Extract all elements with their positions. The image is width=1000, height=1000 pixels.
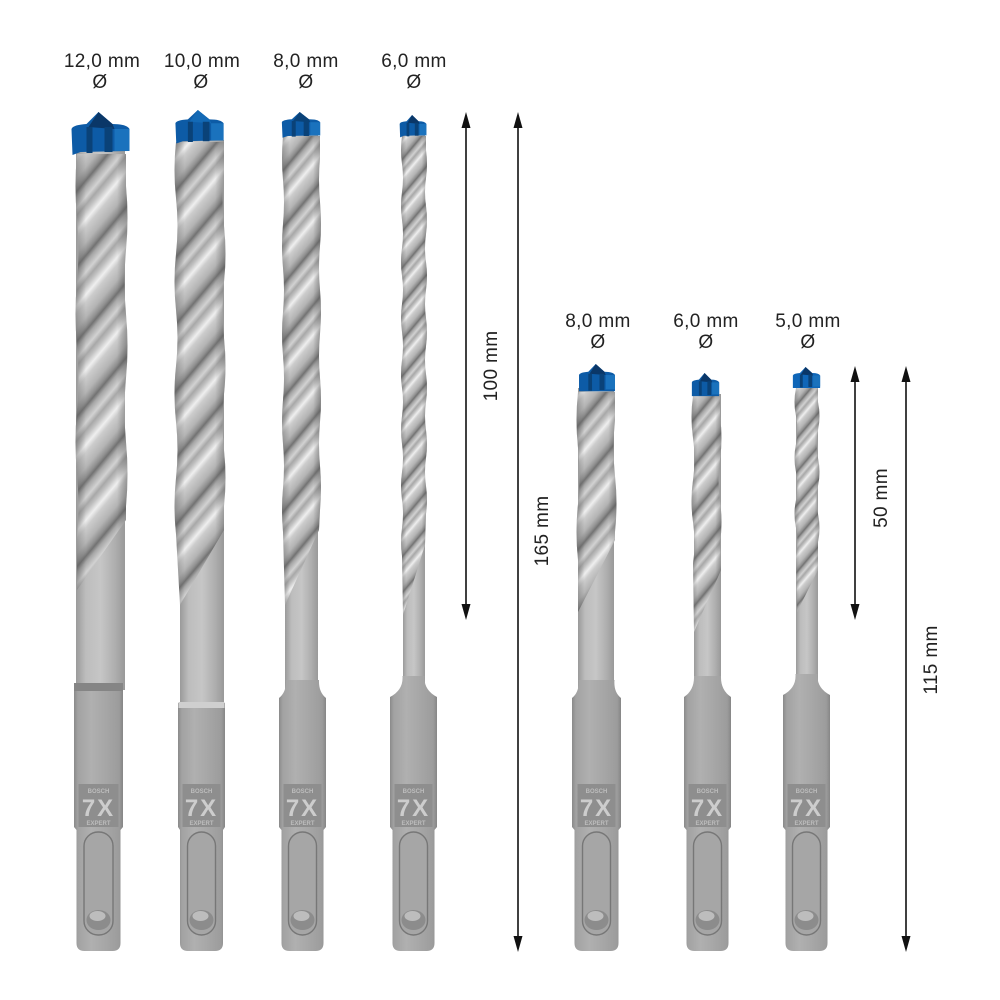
drill bit 10,0 mm bbox=[174, 110, 226, 951]
diameter label 6,0 mm short: Ø bbox=[698, 332, 714, 353]
marking panel: BOSCH bbox=[292, 789, 313, 795]
shank slot bbox=[288, 832, 316, 935]
spiral flutes bbox=[401, 136, 427, 615]
marking panel: EXPERT bbox=[86, 821, 111, 827]
length label 165 mm: 165 mm bbox=[532, 496, 553, 566]
blue carbide tip bbox=[72, 112, 130, 155]
marking panel: 7X bbox=[286, 795, 319, 822]
marking panel bbox=[578, 784, 616, 827]
marking panel: BOSCH bbox=[796, 789, 817, 795]
diameter label 8,0 mm short: Ø bbox=[590, 332, 606, 353]
marking panel: EXPERT bbox=[189, 821, 214, 827]
marking panel: 7X bbox=[185, 795, 218, 822]
diameter label 8,0 mm short: 8,0 mm bbox=[565, 311, 631, 332]
shank bbox=[572, 680, 621, 951]
spiral flutes bbox=[692, 396, 722, 632]
flute shading bbox=[282, 136, 321, 605]
marking panel bbox=[78, 784, 118, 827]
shank bbox=[279, 680, 326, 951]
shank slot bbox=[694, 832, 722, 935]
blue carbide tip bbox=[282, 112, 320, 138]
shaft neck bbox=[285, 135, 318, 700]
arrow 165 mm bbox=[514, 112, 522, 952]
shank bbox=[74, 683, 123, 951]
length label 100 mm: 100 mm bbox=[481, 331, 502, 401]
shank slot bbox=[792, 832, 820, 935]
marking panel bbox=[182, 784, 220, 827]
diameter label 10,0 mm: 10,0 mm bbox=[164, 51, 240, 72]
diameter label 12,0 mm: Ø bbox=[92, 72, 108, 93]
diameter label 5,0 mm: Ø bbox=[800, 332, 816, 353]
diameter label 6,0 mm long: Ø bbox=[406, 72, 422, 93]
shank bbox=[178, 702, 225, 951]
marking panel: 7X bbox=[82, 795, 115, 822]
shaft neck bbox=[578, 388, 614, 693]
marking panel: 7X bbox=[691, 795, 724, 822]
diameter label 10,0 mm bbox=[164, 51, 240, 93]
marking panel: EXPERT bbox=[290, 821, 315, 827]
shank bbox=[783, 674, 830, 951]
spiral flutes bbox=[282, 136, 321, 605]
flute shading bbox=[174, 142, 226, 605]
diameter label 6,0 mm short bbox=[673, 311, 739, 353]
marking panel: 7X bbox=[580, 795, 613, 822]
spiral flutes bbox=[174, 142, 226, 605]
shaft neck bbox=[694, 394, 721, 689]
blue carbide tip bbox=[793, 367, 820, 388]
marking panel bbox=[788, 784, 826, 827]
drill bit 12,0 mm bbox=[72, 112, 130, 951]
marking panel: 7X bbox=[397, 795, 430, 822]
marking panel bbox=[688, 784, 726, 827]
flute shading bbox=[76, 154, 128, 590]
diameter label 5,0 mm: 5,0 mm bbox=[775, 311, 841, 332]
shank bbox=[684, 676, 731, 951]
marking panel bbox=[284, 784, 322, 827]
diameter label 10,0 mm: Ø bbox=[193, 72, 209, 93]
diameter label 6,0 mm long: 6,0 mm bbox=[381, 51, 447, 72]
flute shading bbox=[576, 392, 616, 612]
shaft neck bbox=[180, 140, 224, 705]
shank bbox=[390, 676, 437, 951]
marking panel bbox=[394, 784, 432, 827]
marking panel: BOSCH bbox=[586, 789, 607, 795]
diameter label 8,0 mm long: Ø bbox=[298, 72, 314, 93]
flute shading bbox=[692, 396, 722, 632]
shank slot bbox=[84, 832, 113, 935]
drill bit 8,0 mm short bbox=[572, 364, 621, 951]
marking panel: BOSCH bbox=[191, 789, 212, 795]
shank slot bbox=[582, 832, 610, 935]
marking panel: BOSCH bbox=[403, 789, 424, 795]
spiral flutes bbox=[576, 392, 616, 612]
diameter label 12,0 mm: 12,0 mm bbox=[64, 51, 140, 72]
shaft neck bbox=[403, 135, 425, 685]
marking panel: EXPERT bbox=[794, 821, 819, 827]
flute shading bbox=[401, 136, 427, 615]
drill bit 6,0 mm long bbox=[390, 115, 437, 951]
marking panel: 7X bbox=[790, 795, 823, 822]
diameter label 8,0 mm long bbox=[273, 51, 339, 93]
diameter label 8,0 mm long: 8,0 mm bbox=[273, 51, 339, 72]
diameter label 6,0 mm long bbox=[381, 51, 447, 93]
diameter label 6,0 mm short: 6,0 mm bbox=[673, 311, 739, 332]
drill bit 8,0 mm long bbox=[279, 112, 326, 951]
length label 115 mm: 115 mm bbox=[921, 625, 942, 695]
arrow 50 mm bbox=[850, 366, 860, 620]
shank slot bbox=[188, 832, 216, 935]
spiral flutes bbox=[76, 154, 128, 590]
marking panel: EXPERT bbox=[401, 821, 426, 827]
blue carbide tip bbox=[400, 115, 426, 137]
marking panel: BOSCH bbox=[88, 789, 109, 795]
drill bit 5,0 mm bbox=[783, 367, 830, 951]
diameter label 12,0 mm bbox=[64, 51, 140, 93]
drill bit 6,0 mm short bbox=[684, 373, 731, 951]
shank slot bbox=[400, 832, 428, 935]
marking panel: EXPERT bbox=[584, 821, 609, 827]
blue carbide tip bbox=[579, 364, 615, 391]
blue carbide tip bbox=[692, 373, 719, 396]
diameter label 8,0 mm short bbox=[565, 311, 631, 353]
shaft neck bbox=[76, 150, 125, 690]
arrow 115 mm bbox=[902, 366, 910, 952]
flute shading bbox=[794, 388, 820, 612]
shaft neck bbox=[796, 386, 818, 686]
arrow 100 mm bbox=[462, 112, 470, 620]
length label 50 mm: 50 mm bbox=[871, 468, 892, 528]
spiral flutes bbox=[794, 388, 820, 612]
marking panel: EXPERT bbox=[695, 821, 720, 827]
marking panel: BOSCH bbox=[697, 789, 718, 795]
diameter label 5,0 mm bbox=[775, 311, 841, 353]
blue carbide tip bbox=[175, 110, 224, 144]
